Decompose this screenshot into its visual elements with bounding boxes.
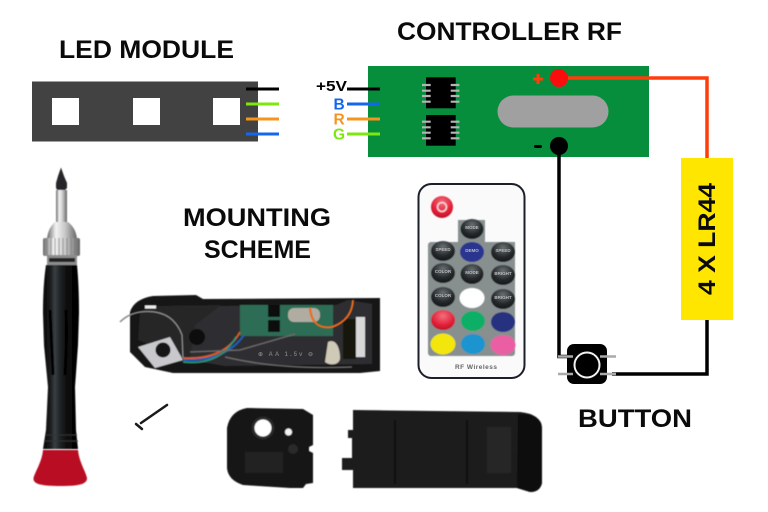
inner floor: [138, 305, 220, 362]
shaft: [56, 190, 67, 223]
power button: [431, 196, 453, 218]
heading: BUTTON: BUTTON: [578, 405, 692, 433]
LED strip module: [32, 82, 279, 142]
LED square 1: [52, 98, 79, 125]
chip 1: [422, 77, 459, 108]
white notch: [145, 306, 156, 308]
positive terminal: [550, 69, 568, 87]
remote button labels: SPEED: [435, 247, 451, 252]
heading: MOUNTING SCHEME: SCHEME: [204, 236, 311, 264]
remote button labels: [435, 225, 512, 300]
white button: [460, 288, 484, 308]
remote button labels: BRIGHT: [494, 295, 512, 300]
remote button labels: SPEED: [495, 248, 511, 253]
remote button labels: BRIGHT: [494, 271, 512, 276]
demo button: [460, 242, 484, 262]
controller input labels and wires: R: [334, 112, 345, 128]
RF remote control: [418, 184, 524, 378]
controller input labels and wires: [316, 79, 380, 144]
chip 2: [422, 115, 459, 146]
controller input labels and wires: G: [333, 126, 345, 144]
remote button labels: COLOR: [435, 269, 452, 274]
black wire from negative terminal to button: [559, 146, 572, 356]
controller RF board: [368, 66, 649, 157]
remote button labels: MODE: [465, 225, 479, 230]
chuck cone: [47, 222, 77, 239]
heading: LED MODULE: LED MODULE: [59, 36, 234, 64]
knurled collar: [43, 238, 80, 256]
remote caption: RF Wireless: [455, 364, 497, 371]
remote button labels: COLOR: [435, 293, 452, 298]
crystal pill: [498, 96, 608, 128]
screw post: [189, 329, 205, 345]
enclosure end cap: [227, 408, 313, 488]
plus sign: [533, 74, 543, 84]
red end cap: [33, 450, 87, 486]
screwdriver: [33, 168, 87, 486]
heading: MOUNTING SCHEME: MOUNTING: [183, 204, 331, 232]
wires: [120, 300, 353, 368]
circuit board: [240, 305, 333, 336]
controller input labels and wires: +5V: [316, 79, 347, 95]
opened enclosure with circuit (mounting scheme): [120, 295, 380, 373]
LED square 2: [133, 98, 160, 125]
enclosure body: [130, 295, 380, 373]
collar ring: [47, 255, 77, 266]
red power wire: [559, 78, 707, 158]
black wire battery to button: [612, 320, 707, 374]
battery contact: [325, 341, 340, 364]
heading: MOUNTING SCHEME: [183, 204, 331, 264]
handle: [43, 265, 79, 449]
small screw: [136, 405, 167, 429]
AA battery marking: ⊕ AA 1.5v ⊖: [258, 352, 313, 358]
LED module wires: [246, 89, 279, 134]
controller input labels and wires: B: [334, 96, 345, 114]
inner battery bay: [190, 300, 372, 366]
handle grooves: [50, 310, 66, 375]
remote button labels: MODE: [465, 270, 479, 275]
function buttons: [431, 219, 515, 309]
negative terminal: [550, 137, 568, 155]
colour buttons: [431, 310, 455, 330]
battery label 4 X LR44: 4 X LR44: [694, 182, 721, 295]
remote button panel: [428, 220, 515, 356]
capacitor: [343, 319, 356, 359]
bit tip: [56, 168, 67, 191]
battery label 4 X LR44: [681, 158, 733, 320]
enclosure bottom cover: [342, 410, 542, 492]
push button: [558, 344, 616, 384]
minus sign: [534, 145, 542, 148]
LED square 3: [213, 98, 240, 125]
heading: CONTROLLER RF: CONTROLLER RF: [397, 18, 622, 46]
tactile button: [138, 337, 183, 368]
remote button labels: DEMO: [465, 248, 479, 253]
